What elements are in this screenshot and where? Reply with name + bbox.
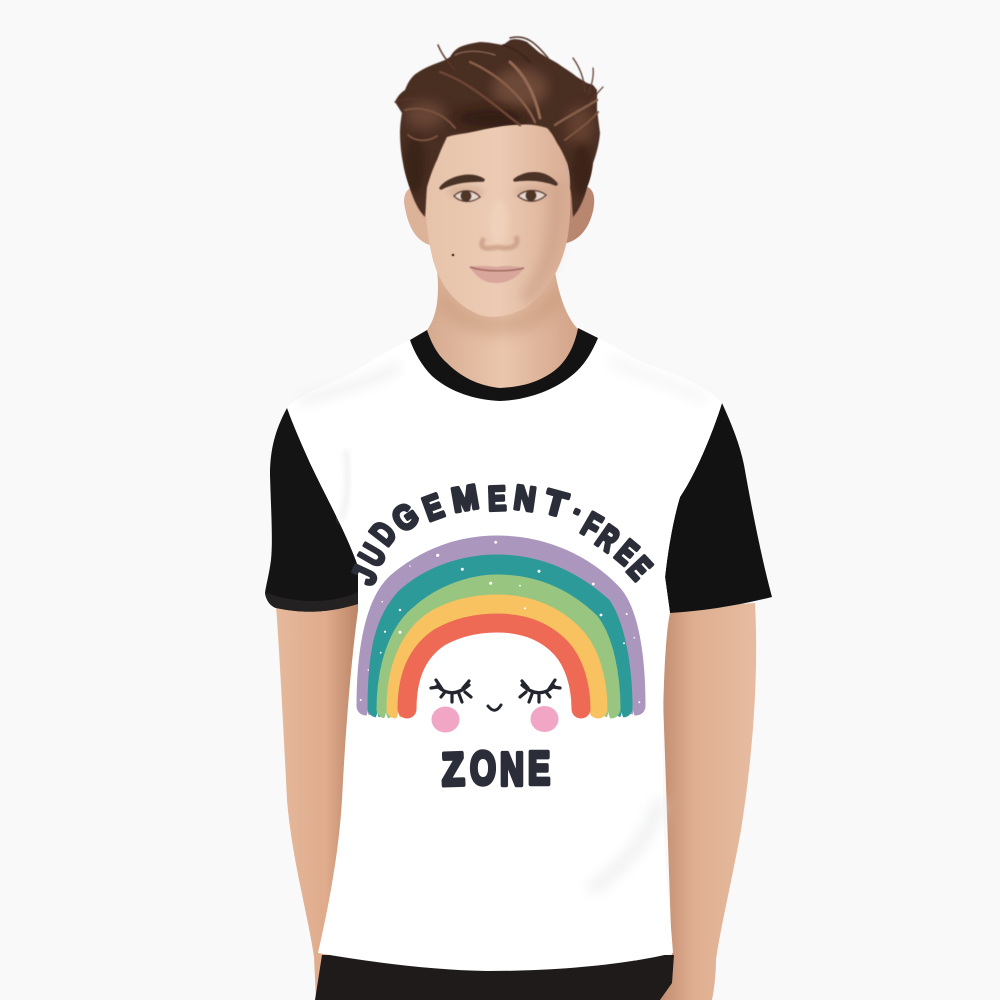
right cheek shading [525,180,557,300]
curved heading: JUDGEMENT-FREE: E [608,533,645,573]
curved heading: JUDGEMENT-FREE: · [569,499,586,525]
curved heading: JUDGEMENT-FREE: F [575,506,607,546]
heading: ZONE: Z [441,743,465,795]
curved heading: JUDGEMENT-FREE: G [385,495,425,539]
rainbow graphic [366,545,636,709]
neck [418,270,588,395]
right cheek [530,706,558,732]
left sleeve [265,408,358,612]
curved heading: JUDGEMENT-FREE: E [487,479,507,518]
heading: ZONE [441,743,550,795]
nose bridge highlight [490,200,508,244]
left eyebrow [441,176,483,188]
heading: ZONE: N [500,745,524,795]
rainbow sparkle dots [360,541,640,703]
curved heading: JUDGEMENT-FREE: U [352,538,394,573]
shirt body [287,338,722,971]
left closed eye [431,680,471,702]
curved heading: JUDGEMENT-FREE: E [418,486,448,529]
left cheek [432,706,460,732]
right eyebrow [515,174,556,184]
red band [407,623,581,709]
mouth [470,266,524,283]
face [425,115,570,317]
curved heading: JUDGEMENT-FREE: M [449,477,481,519]
eye socket shading [448,185,550,199]
collar [410,328,598,401]
scalloped notches at band ends [364,711,637,721]
right ear [560,185,594,244]
yellow band [396,604,598,709]
mole [452,254,454,256]
curved heading: JUDGEMENT-FREE: D [364,515,404,552]
purple band [366,545,636,706]
curved heading: JUDGEMENT-FREE: J [344,560,385,590]
curved heading: JUDGEMENT-FREE: R [589,518,625,559]
teal band [377,564,623,708]
left arm [276,600,360,1000]
heading: ZONE: O [470,744,496,794]
hair light and dark volumes [405,68,594,196]
rainbow face [431,680,560,732]
right eye [518,190,546,201]
trousers [315,955,674,1000]
curved heading: JUDGEMENT-FREE [344,477,659,590]
shirt fold shading [340,450,348,520]
curved heading: JUDGEMENT-FREE: E [620,550,659,588]
curved heading: JUDGEMENT-FREE: T [540,483,571,525]
right arm and hand [660,603,756,1000]
left ear [404,186,435,246]
green band [386,584,611,709]
lip line [470,267,524,271]
nose shadow [482,236,517,248]
right sleeve [665,403,772,613]
right closed eye [520,680,560,702]
hair strands [395,37,603,140]
hair [395,39,600,217]
curved heading: JUDGEMENT-FREE: N [512,478,538,519]
neck shadow under chin [441,290,562,338]
left eye [454,190,480,202]
heading: ZONE: E [528,744,550,794]
model head [395,37,603,317]
smile [488,705,501,710]
left sleeve hem [265,592,358,612]
product photo: model wearing graphic t-shirt [265,35,772,1000]
